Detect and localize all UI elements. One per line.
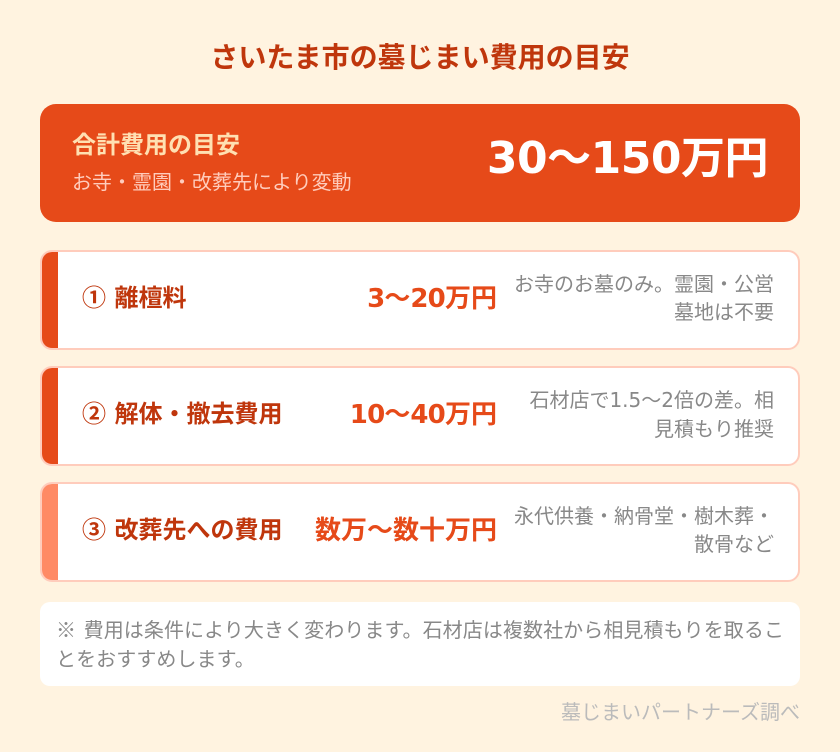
panel: item 1 <box>40 250 800 350</box>
item description: 永代供養・納骨堂・樹木葬・散骨など <box>514 500 774 557</box>
item description: 石材店で1.5〜2倍の差。相見積もり推奨 <box>529 384 774 442</box>
banner subtext: お寺・霊園・改葬先により変動 <box>72 166 352 195</box>
source credit: 墓じまいパートナーズ調べ <box>561 696 800 725</box>
panel: item 2 <box>40 366 800 466</box>
item name: ② 解体・撤去費用 <box>82 394 282 429</box>
note: とをおすすめします。 <box>56 643 255 672</box>
item amount: 10〜40万円 <box>350 394 497 431</box>
panel: total cost banner <box>40 104 800 222</box>
banner heading: 合計費用の目安 <box>72 125 240 160</box>
banner amount: 30〜150万円 <box>487 122 768 186</box>
accent bar <box>42 368 58 464</box>
accent bar <box>42 484 58 580</box>
item amount: 3〜20万円 <box>367 278 497 315</box>
note: ※ 費用は条件により大きく変わります。石材店は複数社から相見積もりを取るこ <box>56 614 784 643</box>
title: さいたま市の墓じまい費用の目安 <box>210 36 630 76</box>
item name: ③ 改葬先への費用 <box>82 510 282 545</box>
item name: ① 離檀料 <box>82 278 186 313</box>
item amount: 数万〜数十万円 <box>315 510 497 547</box>
panel: item 3 <box>40 482 800 582</box>
item description: お寺のお墓のみ。霊園・公営墓地は不要 <box>514 268 774 325</box>
note <box>40 602 800 686</box>
accent bar <box>42 252 58 348</box>
